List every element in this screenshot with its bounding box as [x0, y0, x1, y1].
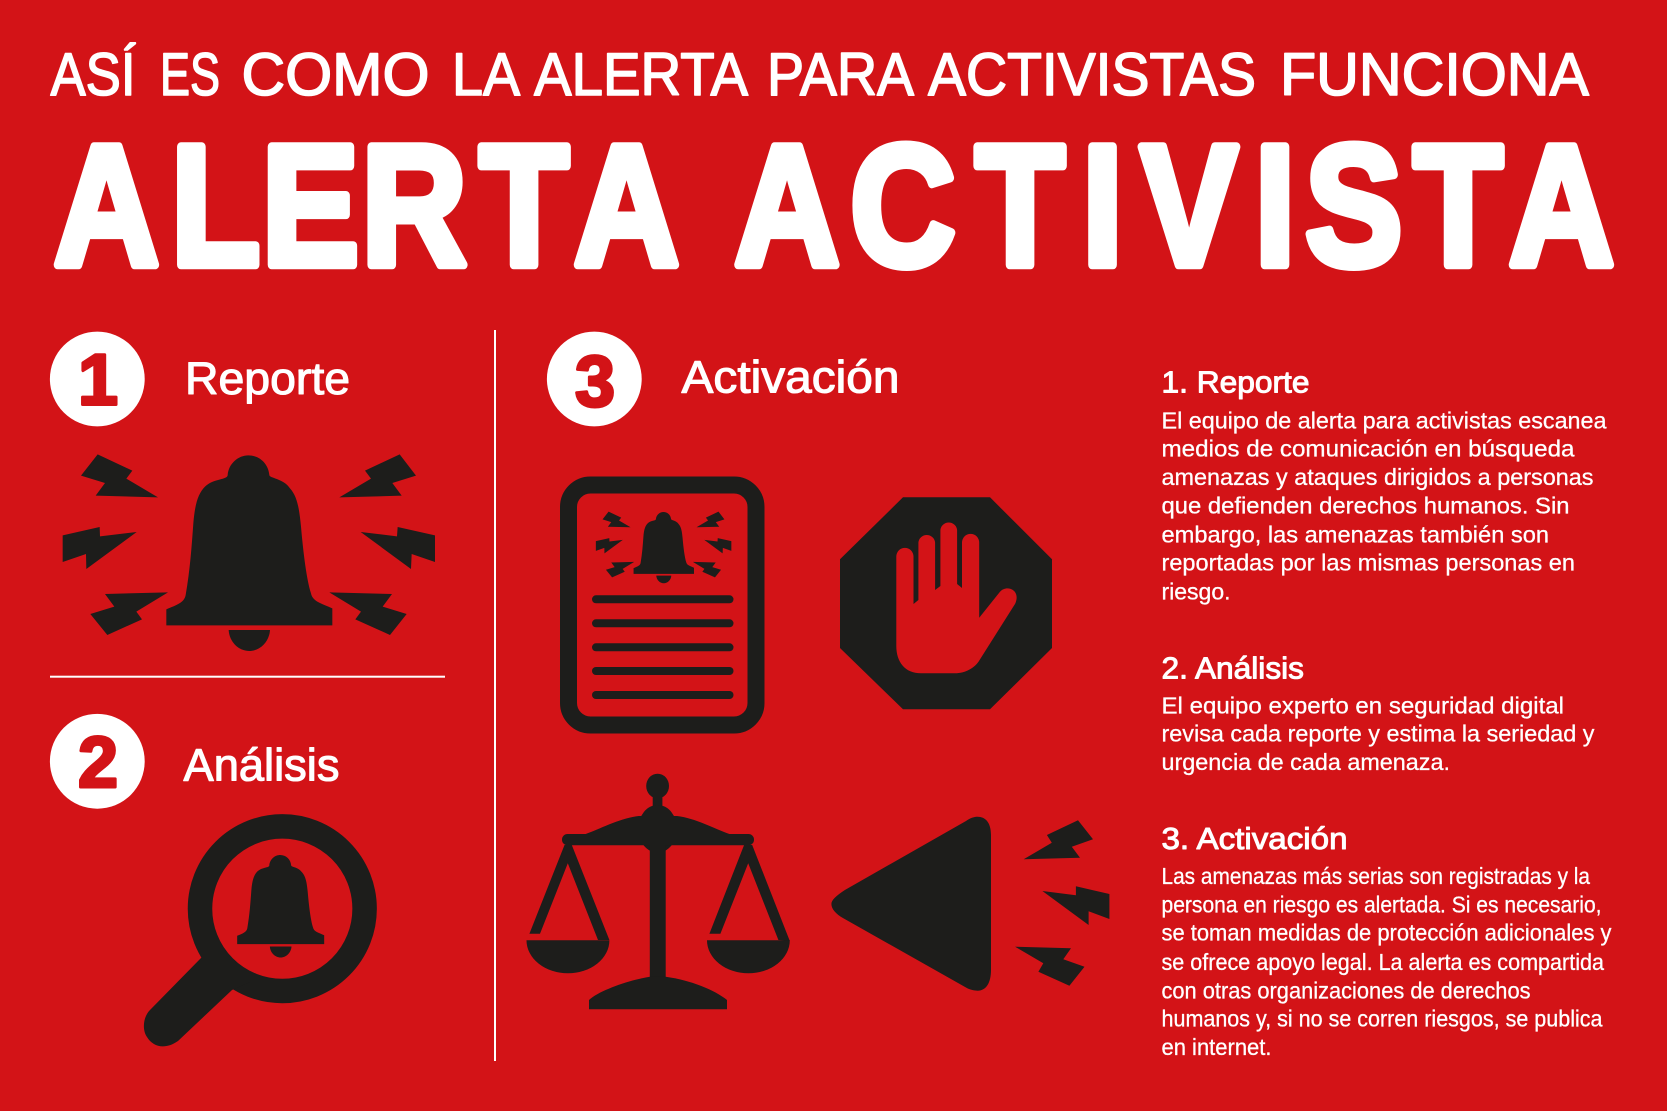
- step 3 number badge: 3: [575, 342, 615, 422]
- title: subtitle line: ES: [160, 41, 220, 108]
- body: amenazas y ataques dirigidos a personas: [1162, 464, 1594, 490]
- step 2 number badge: 2: [78, 723, 118, 803]
- body: reportadas por las mismas personas en: [1162, 550, 1575, 576]
- icon: document with bell: [568, 485, 756, 725]
- title: main heading: ALERTA ACTIVISTA: [54, 110, 1614, 301]
- step 3 heading: Activación: [682, 352, 900, 403]
- icon: scales of justice: [526, 774, 790, 1009]
- title: subtitle line: ALERTA: [534, 41, 748, 108]
- body: El equipo de alerta para activistas escanea: [1162, 408, 1607, 434]
- heading: 2. Análisis: [1162, 650, 1304, 685]
- body: en internet.: [1162, 1034, 1272, 1060]
- body: persona en riesgo es alertada. Si es necesario,: [1162, 891, 1602, 917]
- title: subtitle line: ACTIVISTAS: [928, 41, 1256, 108]
- panel: step 2 analisis: [50, 714, 365, 1046]
- icon: ringing bell: [63, 454, 435, 651]
- title: subtitle line: ASÍ: [50, 41, 136, 108]
- step 1 number badge: 1: [78, 340, 118, 420]
- body: que defienden derechos humanos. Sin: [1162, 492, 1570, 518]
- icon: stop sign with hand: [840, 497, 1052, 709]
- title: subtitle line: PARA: [767, 41, 914, 108]
- title: subtitle line: LA: [452, 41, 520, 108]
- panel: step 1 reporte: [50, 332, 435, 651]
- body: Las amenazas más serias son registradas y la: [1162, 863, 1590, 889]
- title: subtitle line: FUNCIONA: [1280, 41, 1589, 108]
- body: humanos y, si no se corren riesgos, se publica: [1162, 1006, 1603, 1032]
- heading: 3. Activación: [1162, 821, 1348, 856]
- body: medios de comunicación en búsqueda: [1162, 436, 1575, 462]
- body: se toman medidas de protección adicionales y: [1162, 920, 1612, 946]
- body: embargo, las amenazas también son: [1162, 522, 1549, 548]
- step 1 heading: Reporte: [185, 353, 350, 404]
- panel: step 3 activacion: [526, 332, 1109, 1009]
- body: se ofrece apoyo legal. La alerta es compartida: [1162, 949, 1604, 975]
- divider: horizontal: [50, 676, 445, 678]
- divider: vertical: [494, 330, 496, 1061]
- body: urgencia de cada amenaza.: [1162, 749, 1450, 775]
- step 2 number badge: [50, 714, 145, 809]
- body: [1162, 863, 1612, 1060]
- text block: 3. Activación: [1162, 821, 1612, 1060]
- icon: megaphone with sound bolts: [831, 817, 1109, 991]
- text block: 2. Análisis: [1162, 650, 1595, 775]
- title: subtitle line: COMO: [242, 41, 430, 108]
- body: con otras organizaciones de derechos: [1162, 977, 1530, 1003]
- body: revisa cada reporte y estima la seriedad y: [1162, 721, 1595, 747]
- text block: 1. Reporte: [1162, 365, 1607, 604]
- body: riesgo.: [1162, 578, 1230, 604]
- step 1 number badge: [50, 332, 145, 426]
- heading: 1. Reporte: [1162, 365, 1310, 400]
- step 2 heading: Análisis: [184, 740, 340, 791]
- step 3 number badge: [547, 332, 642, 426]
- body: El equipo experto en seguridad digital: [1162, 692, 1564, 718]
- icon: magnifying glass with bell: [144, 826, 365, 1046]
- body: [1162, 408, 1607, 604]
- body: [1162, 692, 1595, 775]
